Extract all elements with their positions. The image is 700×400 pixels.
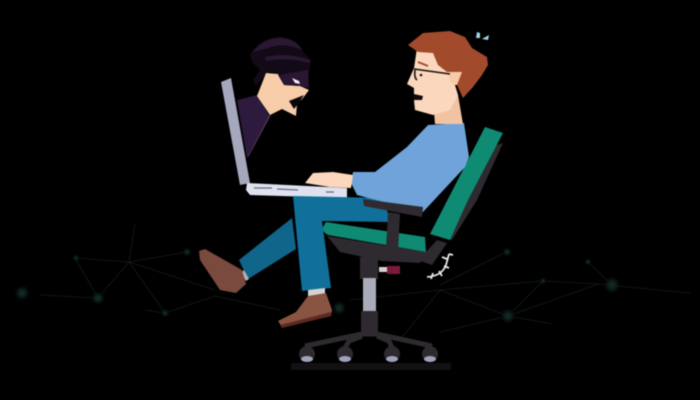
laptop screen <box>221 78 250 185</box>
man <box>199 31 489 328</box>
far leg <box>239 218 296 279</box>
hacker mouth <box>289 95 304 109</box>
near sock <box>308 288 325 297</box>
chair column <box>360 257 378 279</box>
chair <box>291 127 503 370</box>
armrest post <box>386 212 400 252</box>
far sock <box>241 270 249 281</box>
mouth <box>414 94 423 100</box>
ear <box>449 67 463 85</box>
laptop <box>221 78 347 198</box>
chair spring <box>427 254 453 279</box>
chair wheels <box>299 346 438 362</box>
glasses <box>414 69 450 80</box>
hacker body <box>237 95 269 158</box>
hand <box>305 172 353 188</box>
face <box>407 48 458 115</box>
near shoe <box>278 293 332 327</box>
hacker eye <box>292 78 300 84</box>
chair star base <box>305 334 432 348</box>
eye <box>420 74 422 76</box>
armrest <box>363 199 423 217</box>
chair lever <box>379 267 387 272</box>
hacker <box>237 37 311 158</box>
hair <box>408 31 488 98</box>
hacker hat <box>250 37 311 86</box>
network constellation <box>13 224 690 340</box>
far shoe <box>199 249 246 293</box>
eyebrow <box>418 62 428 66</box>
chair backrest <box>437 143 503 240</box>
chair seat base <box>327 236 426 263</box>
hacker face <box>257 73 309 116</box>
chair seat cushion <box>323 222 426 252</box>
near leg <box>293 196 390 291</box>
sweat drops <box>476 32 489 40</box>
hacker mask <box>278 70 309 88</box>
chair bracket <box>412 240 447 265</box>
chair floor shadow <box>291 363 451 370</box>
shirt <box>351 123 469 212</box>
laptop base <box>246 183 347 198</box>
neck <box>434 95 463 124</box>
